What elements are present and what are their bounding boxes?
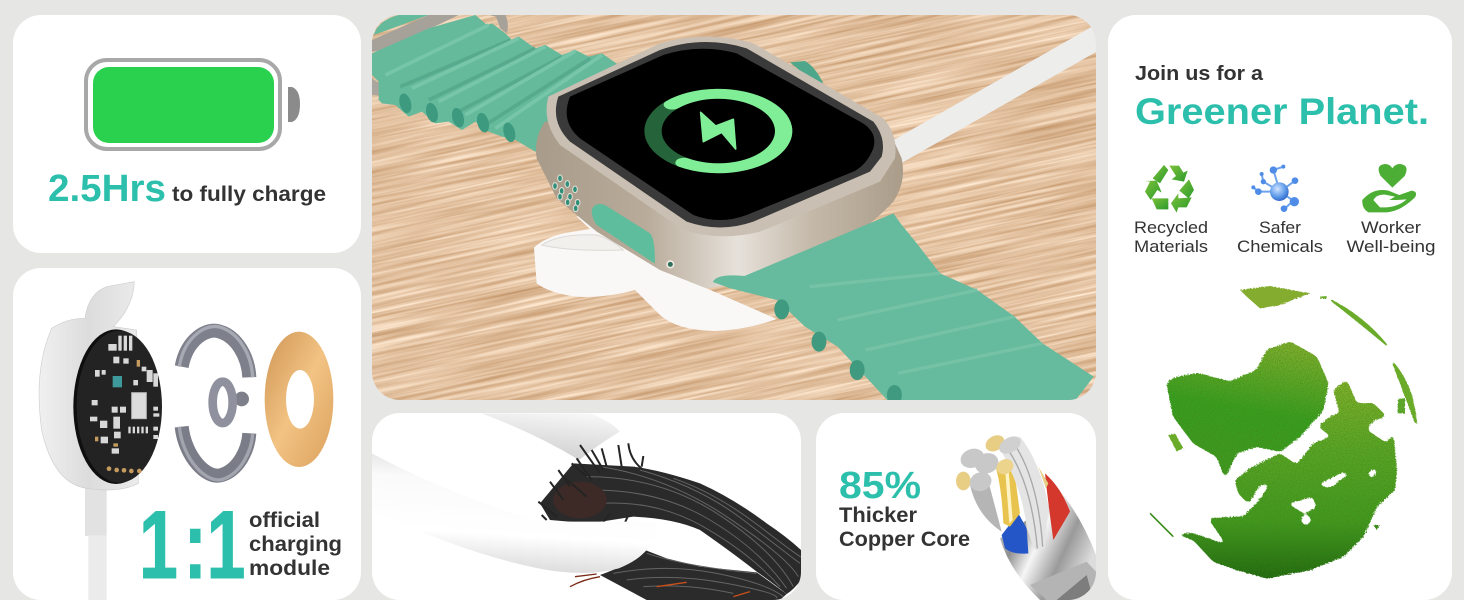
icon: battery — [86, 60, 300, 149]
copper core text: 85% — [839, 465, 921, 507]
wire ends — [956, 435, 1021, 492]
charger cable — [888, 29, 1112, 157]
exploded charger illustration — [39, 282, 333, 600]
panel: watch on charger photo — [372, 15, 1096, 400]
watch bezel and screen — [547, 37, 896, 236]
black braid — [538, 443, 801, 600]
charge time text: 2.5Hrs — [48, 168, 166, 210]
charger housing — [39, 282, 138, 490]
side button — [592, 204, 655, 263]
watch case — [536, 122, 903, 288]
charger cable — [85, 487, 107, 600]
cable cross-section illustration — [956, 432, 1096, 600]
icon: recycling — [1145, 165, 1194, 213]
upper strand — [540, 463, 801, 594]
white cable loop — [372, 453, 657, 573]
module text — [139, 490, 342, 599]
small hole — [667, 261, 674, 268]
lightning bolt — [701, 112, 736, 149]
panel: copper core — [816, 413, 1096, 600]
braided cable photo — [372, 413, 801, 600]
frayed fringe — [538, 443, 643, 530]
icon labels — [1134, 218, 1436, 256]
magnet ring bottom arc — [179, 427, 253, 480]
icon labels: Chemicals — [1237, 237, 1323, 256]
heading: Greener Planet. — [1135, 91, 1429, 132]
panel: charging module — [13, 268, 361, 600]
band lower right — [713, 213, 1094, 407]
watch and charger — [534, 37, 903, 331]
center magnet — [213, 382, 249, 423]
band upper left — [372, 15, 639, 152]
magnet ring top arc — [179, 326, 253, 377]
copper core text — [839, 465, 970, 551]
connector sleeve — [1000, 495, 1096, 600]
digital crown — [790, 61, 823, 83]
copper core text: Copper Core — [839, 528, 970, 551]
lower strand — [600, 549, 787, 600]
heading — [1135, 63, 1429, 132]
continent upper — [1167, 342, 1328, 478]
icon: heart in hand — [1362, 164, 1416, 212]
copper core text: Thicker — [839, 504, 917, 527]
icon labels: Well-being — [1346, 237, 1436, 256]
heading: Join us for a — [1135, 63, 1264, 85]
charge time text — [48, 168, 326, 210]
green grass globe — [1150, 286, 1416, 578]
left braided wire — [970, 485, 1002, 532]
panel: charge time — [13, 15, 361, 253]
wood table — [372, 15, 1096, 400]
module text: official — [249, 509, 320, 532]
charging ring — [653, 94, 784, 168]
small islands — [1150, 286, 1416, 537]
red wire — [1045, 473, 1070, 540]
speaker holes — [553, 175, 580, 212]
braid strands — [587, 467, 801, 598]
gold wire — [996, 468, 1020, 527]
upper cable strand — [481, 413, 620, 460]
charge time text: to fully charge — [172, 183, 326, 206]
right braided wire — [1000, 437, 1048, 550]
orange copper hints — [570, 574, 750, 597]
blue wire — [1002, 513, 1028, 554]
icon labels: Safer — [1259, 218, 1301, 237]
panel: greener planet — [1108, 15, 1452, 600]
core of fringe — [553, 482, 607, 518]
circuit board — [73, 329, 162, 484]
white charger — [534, 210, 777, 331]
module text: 1:1 — [139, 490, 246, 599]
module text: charging — [249, 533, 342, 556]
panel: braided cable — [372, 413, 801, 600]
icon labels: Worker — [1361, 218, 1421, 237]
icon: chemicals molecule — [1251, 165, 1299, 212]
icon labels: Materials — [1134, 237, 1208, 256]
icon labels: Recycled — [1134, 218, 1208, 237]
copper coil — [265, 332, 333, 467]
continent lower — [1173, 380, 1397, 578]
module text: module — [249, 557, 330, 580]
